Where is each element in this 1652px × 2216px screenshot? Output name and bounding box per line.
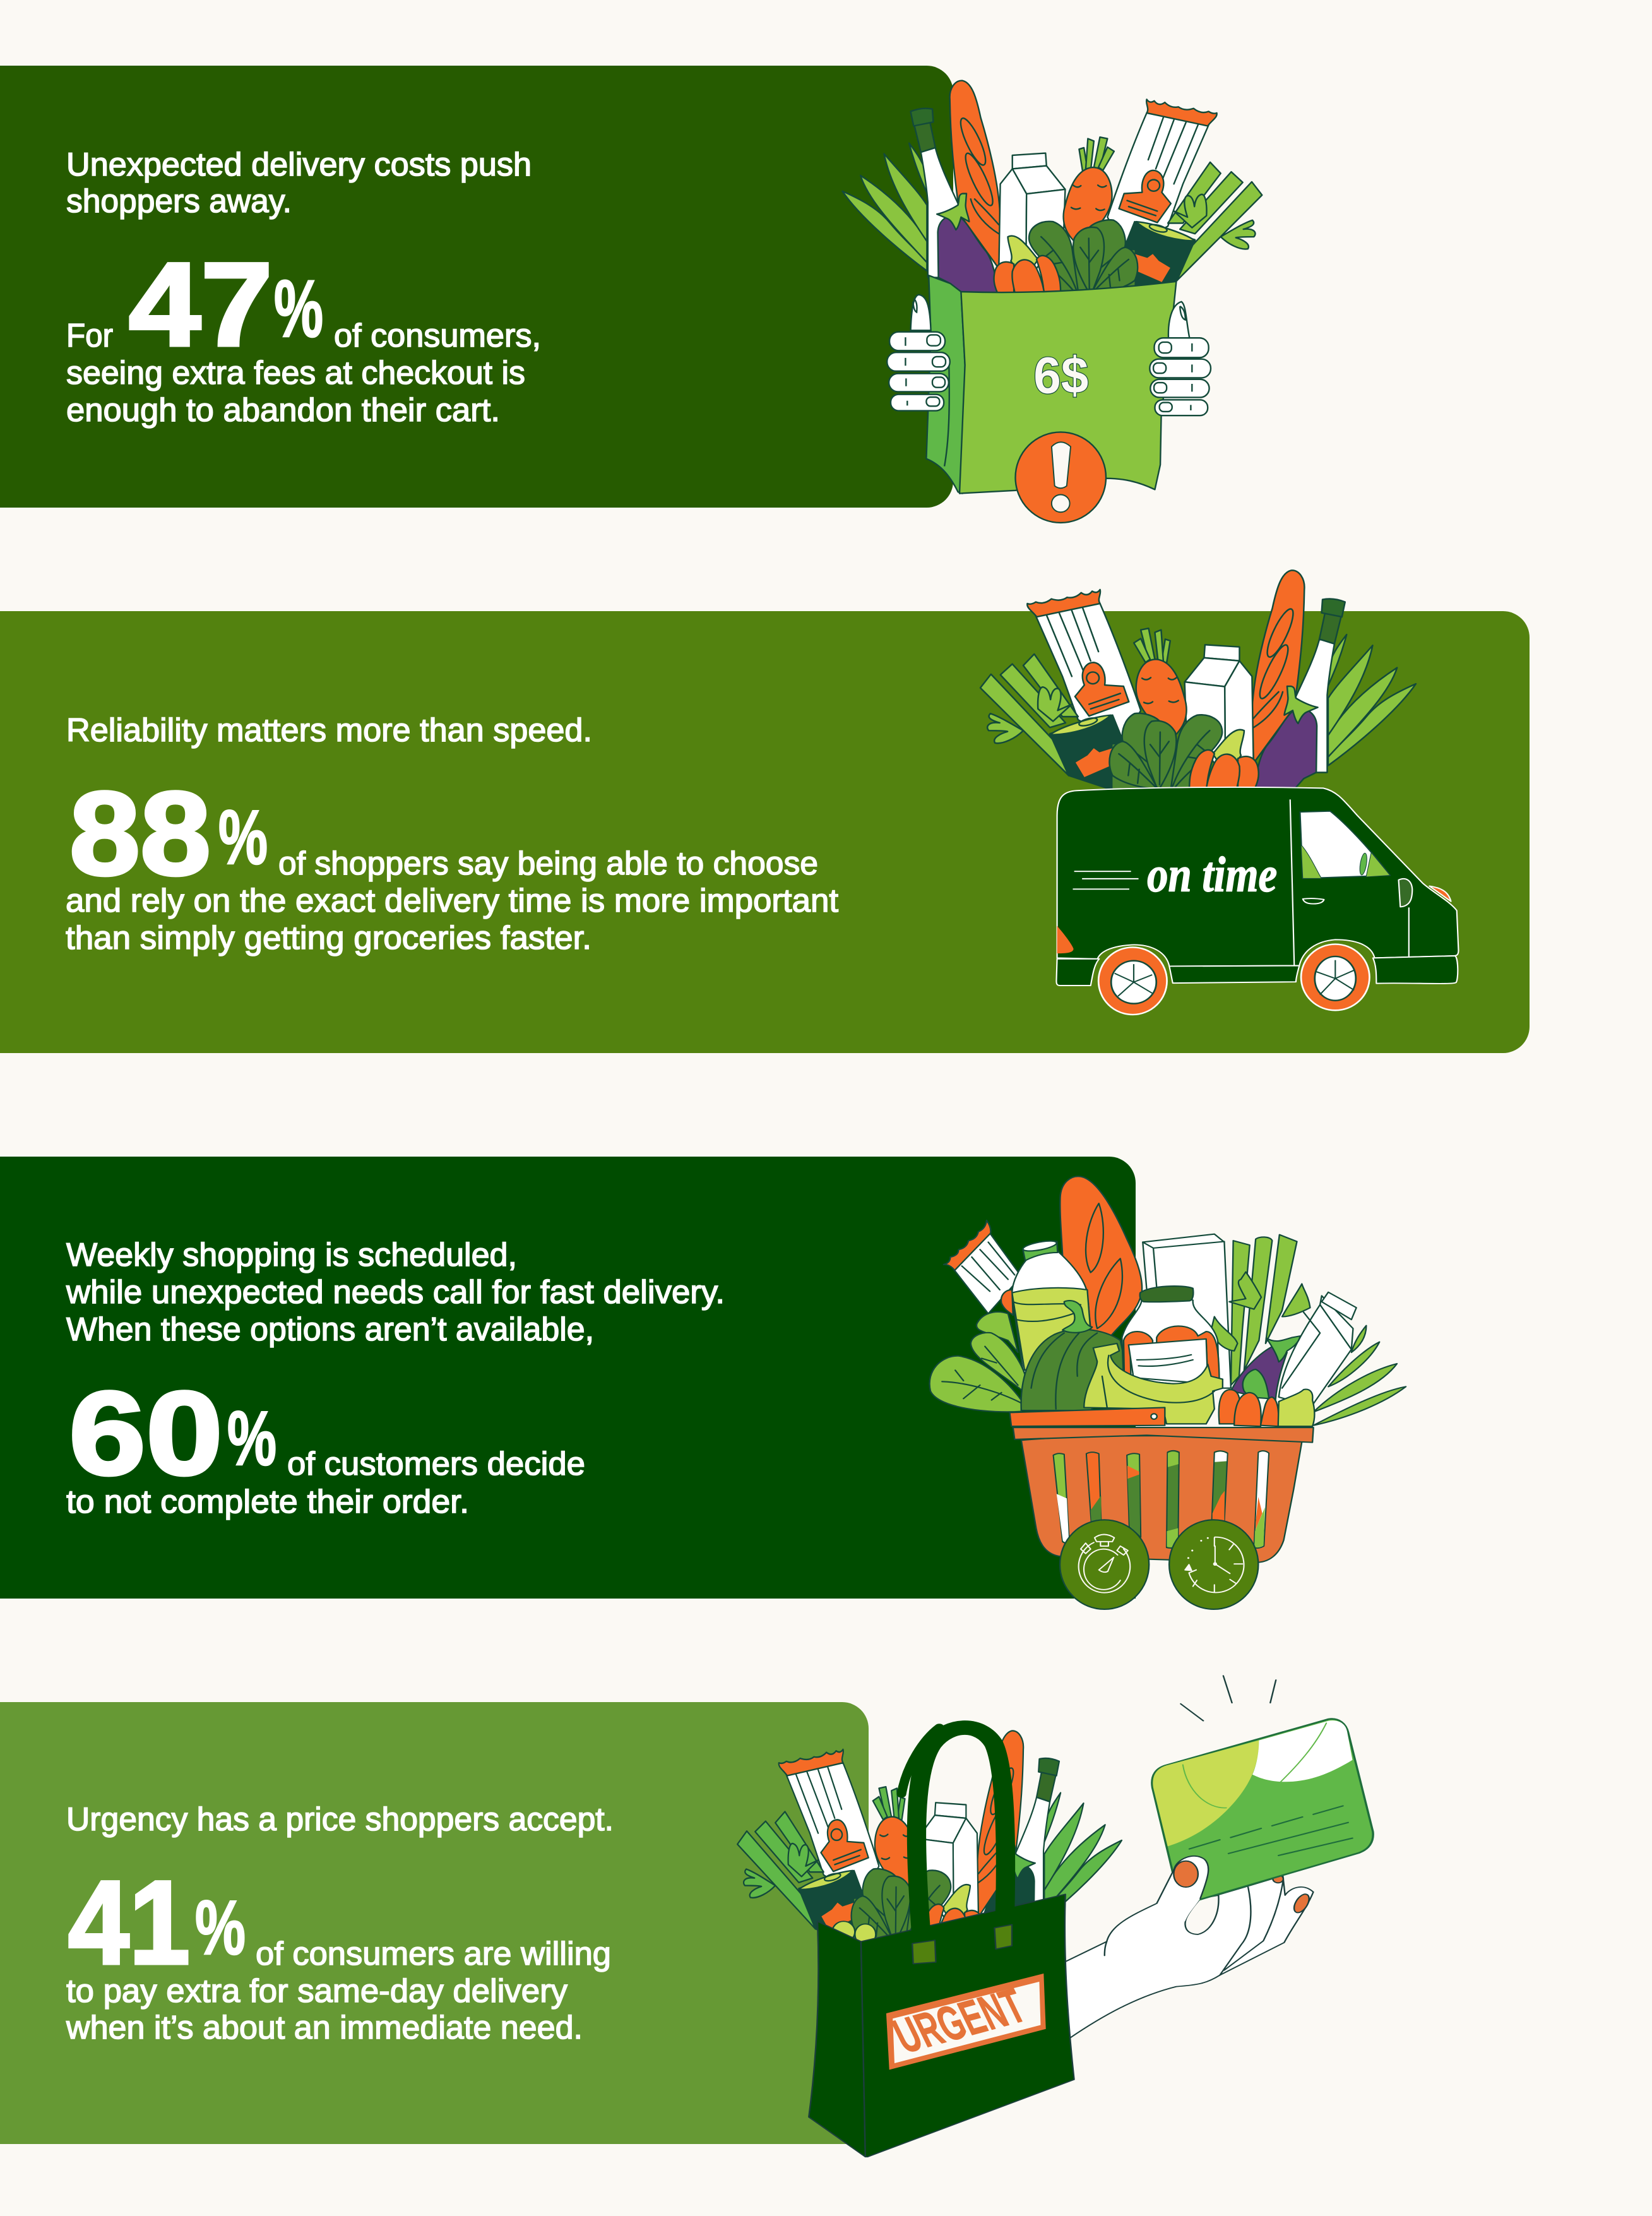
tote side [809,1921,865,2157]
basket handle tab [1010,1407,1165,1426]
statistic: 41 percent: of consumers are willing [256,1936,611,1972]
paper bag [926,275,1176,494]
thumb [1137,1856,1208,1941]
statistic: 88 percent: than simply getting groceries faster. [66,920,591,956]
lower skirts [1056,956,1458,986]
statistic: 88 percent: % [218,794,268,880]
heading: urgency: Urgency has a price shoppers accept. [66,1801,614,1838]
baguette [1060,1176,1142,1340]
spinach [930,1312,1026,1412]
statistic: 88 percent [66,767,839,956]
panel: reliability [0,611,1530,1053]
statistic: 41 percent [66,1856,611,2046]
side mirror [1399,879,1412,907]
right hand [1150,302,1211,415]
milk carton [1279,1292,1357,1406]
leek leaves [1314,1326,1406,1426]
delivery van [1056,787,1458,1015]
statistic: 88 percent: 88 [69,767,211,900]
wheel: stopwatch [1060,1520,1149,1609]
statistic: 41 percent: when it’s about an immediate need. [66,2010,583,2046]
groceries in bag [842,81,1262,295]
rear light [1057,926,1074,953]
urgent stamp: URGENT [884,1979,1034,2063]
finger gap [1185,1895,1218,1934]
tote front [861,1894,1074,2157]
statistic: 41 percent: to pay extra for same-day delivery [66,1973,568,2010]
pasta pack [944,1220,1021,1314]
icon: warning badge [1016,432,1106,523]
panel: urgency [0,1702,869,2144]
groceries in tote [737,1731,1122,1944]
heading: scheduled shopping: Weekly shopping is scheduled, [66,1237,517,1273]
statistic: 47 percent: of consumers, [334,318,541,354]
oil bottle [1012,1239,1091,1406]
lime [1278,1390,1314,1426]
finger lines [1105,1882,1283,1975]
statistic: 47 percent: % [274,264,323,354]
heading: scheduled shopping [66,1237,725,1348]
statistic: 47 percent [66,238,541,429]
heading: delivery costs [66,146,532,220]
basket rim [1013,1427,1314,1443]
urgent stamp [884,1974,1046,2070]
fingernail [1291,1893,1312,1914]
window [1300,811,1390,878]
statistic: 47 percent: 47 [129,238,273,371]
door lines [1290,799,1409,965]
heading: reliability: Reliability matters more than speed. [66,712,592,749]
cardboard box [1143,1234,1231,1388]
price label: 6$ [1033,347,1088,404]
glass jar [1122,1286,1220,1388]
hand holding card [1061,1876,1313,2038]
statistic: 41 percent: % [195,1885,246,1970]
celery [1211,1235,1310,1385]
statistic: 47 percent: enough to abandon their cart. [66,392,500,429]
rear wheel [1098,947,1167,1015]
statistic: 88 percent: of shoppers say being able to choose [278,845,818,882]
heading: delivery costs: shoppers away. [66,183,292,220]
statistic: 88 percent: and rely on the exact delivery time is more important [66,883,839,919]
small pears [832,1921,876,1945]
illustration: groceries on van [980,570,1458,1015]
illustration: grocery bag with fees [842,81,1262,523]
illustration: urgent tote and payment card [737,1676,1373,2157]
heading: delivery costs: Unexpected delivery costs push [66,146,532,183]
basket slots [1054,1451,1269,1548]
illustration: shopping basket on clock wheels [930,1176,1406,1609]
van body [1057,787,1458,966]
speed lines [1073,871,1139,889]
basket body [1021,1436,1302,1563]
statistic: 60 percent: to not complete their order. [66,1484,469,1520]
panel: delivery costs [0,66,953,508]
statistic: 60 percent: of customers decide [287,1446,585,1482]
statistic: 47 percent: For [66,318,113,354]
left hand [887,295,950,411]
front wheel [1301,944,1369,1010]
heading: scheduled shopping: When these options aren’t available, [66,1311,594,1348]
rear handle [901,1727,939,1794]
wheel: clock [1169,1520,1258,1609]
statistic: 41 percent: 41 [68,1856,190,1989]
door handle [1303,898,1324,904]
eggplant [1231,1336,1300,1400]
van lettering: on time [1147,847,1277,903]
statistic: 47 percent: seeing extra fees at checkout is [66,355,525,391]
heading: scheduled shopping: while unexpected needs call for fast delivery. [66,1274,725,1311]
front handle [917,1728,1006,1944]
bananas [1084,1343,1223,1424]
panel: scheduled shopping [0,1157,1136,1599]
groceries on roof [980,570,1416,791]
handle tabs [912,1924,1012,1963]
fingertip nail behind card [1273,1875,1283,1883]
statistic: 60 percent: 60 [69,1367,223,1499]
orange clip behind bottle [1001,1290,1013,1315]
headlight [1429,886,1451,902]
statistic: 60 percent [66,1367,585,1520]
payment card [1152,1719,1373,1900]
statistic: 60 percent: % [227,1395,276,1481]
melon [1021,1301,1127,1410]
bell pepper [1219,1369,1279,1426]
spark lines [1180,1676,1276,1721]
